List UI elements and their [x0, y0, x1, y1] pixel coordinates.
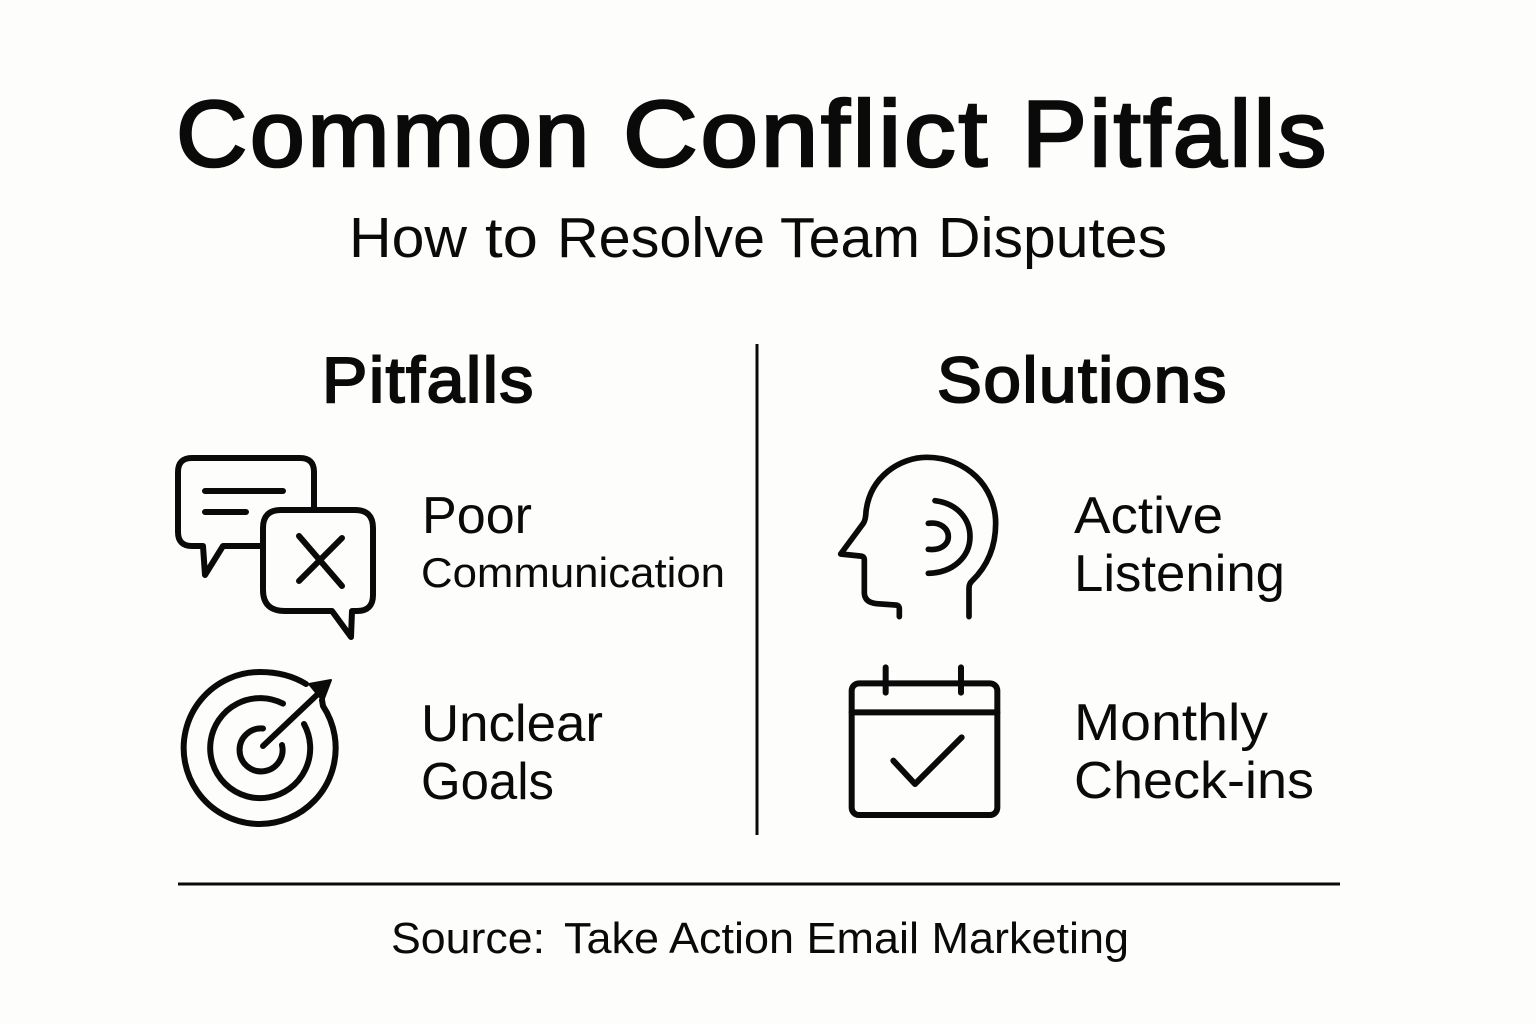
- label: unclear goals: Unclear: [421, 695, 603, 753]
- icon: head with sound waves: [841, 457, 996, 617]
- label: poor communication: Poor: [422, 487, 532, 545]
- label: poor communication: Communication: [421, 549, 725, 596]
- subtitle: Disputes: [938, 206, 1167, 270]
- label: poor communication: [421, 487, 725, 596]
- subtitle: Resolve: [557, 206, 765, 270]
- label: active listening: Listening: [1074, 545, 1285, 603]
- label: active listening: [1074, 487, 1285, 603]
- label: unclear goals: Goals: [421, 753, 554, 811]
- title: [176, 81, 1329, 186]
- title: Common: [176, 81, 592, 186]
- center divider: [756, 344, 758, 835]
- icon: speech bubbles with X: [178, 458, 373, 637]
- panel: pitfalls: [178, 344, 725, 824]
- title: Conflict: [623, 81, 990, 186]
- panel: solutions: [841, 344, 1314, 815]
- icon: target with arrow: [184, 672, 336, 824]
- subtitle: to: [485, 206, 538, 270]
- label: monthly check-ins: [1074, 694, 1314, 810]
- label: monthly check-ins: Check-ins: [1074, 752, 1314, 810]
- source line: Take Action Email Marketing: [564, 914, 1129, 963]
- icon: calendar with check: [852, 667, 997, 815]
- label: unclear goals: [421, 695, 603, 811]
- subtitle: How: [349, 206, 468, 270]
- heading: solutions: Solutions: [937, 344, 1228, 416]
- subtitle: Team: [780, 206, 920, 270]
- heading: pitfalls: Pitfalls: [322, 344, 535, 416]
- title: Pitfalls: [1022, 81, 1329, 186]
- label: active listening: Active: [1074, 487, 1223, 545]
- footer rule: [178, 882, 1340, 886]
- label: monthly check-ins: Monthly: [1074, 694, 1268, 752]
- subtitle: [349, 206, 1167, 270]
- source line: Source:: [391, 914, 545, 963]
